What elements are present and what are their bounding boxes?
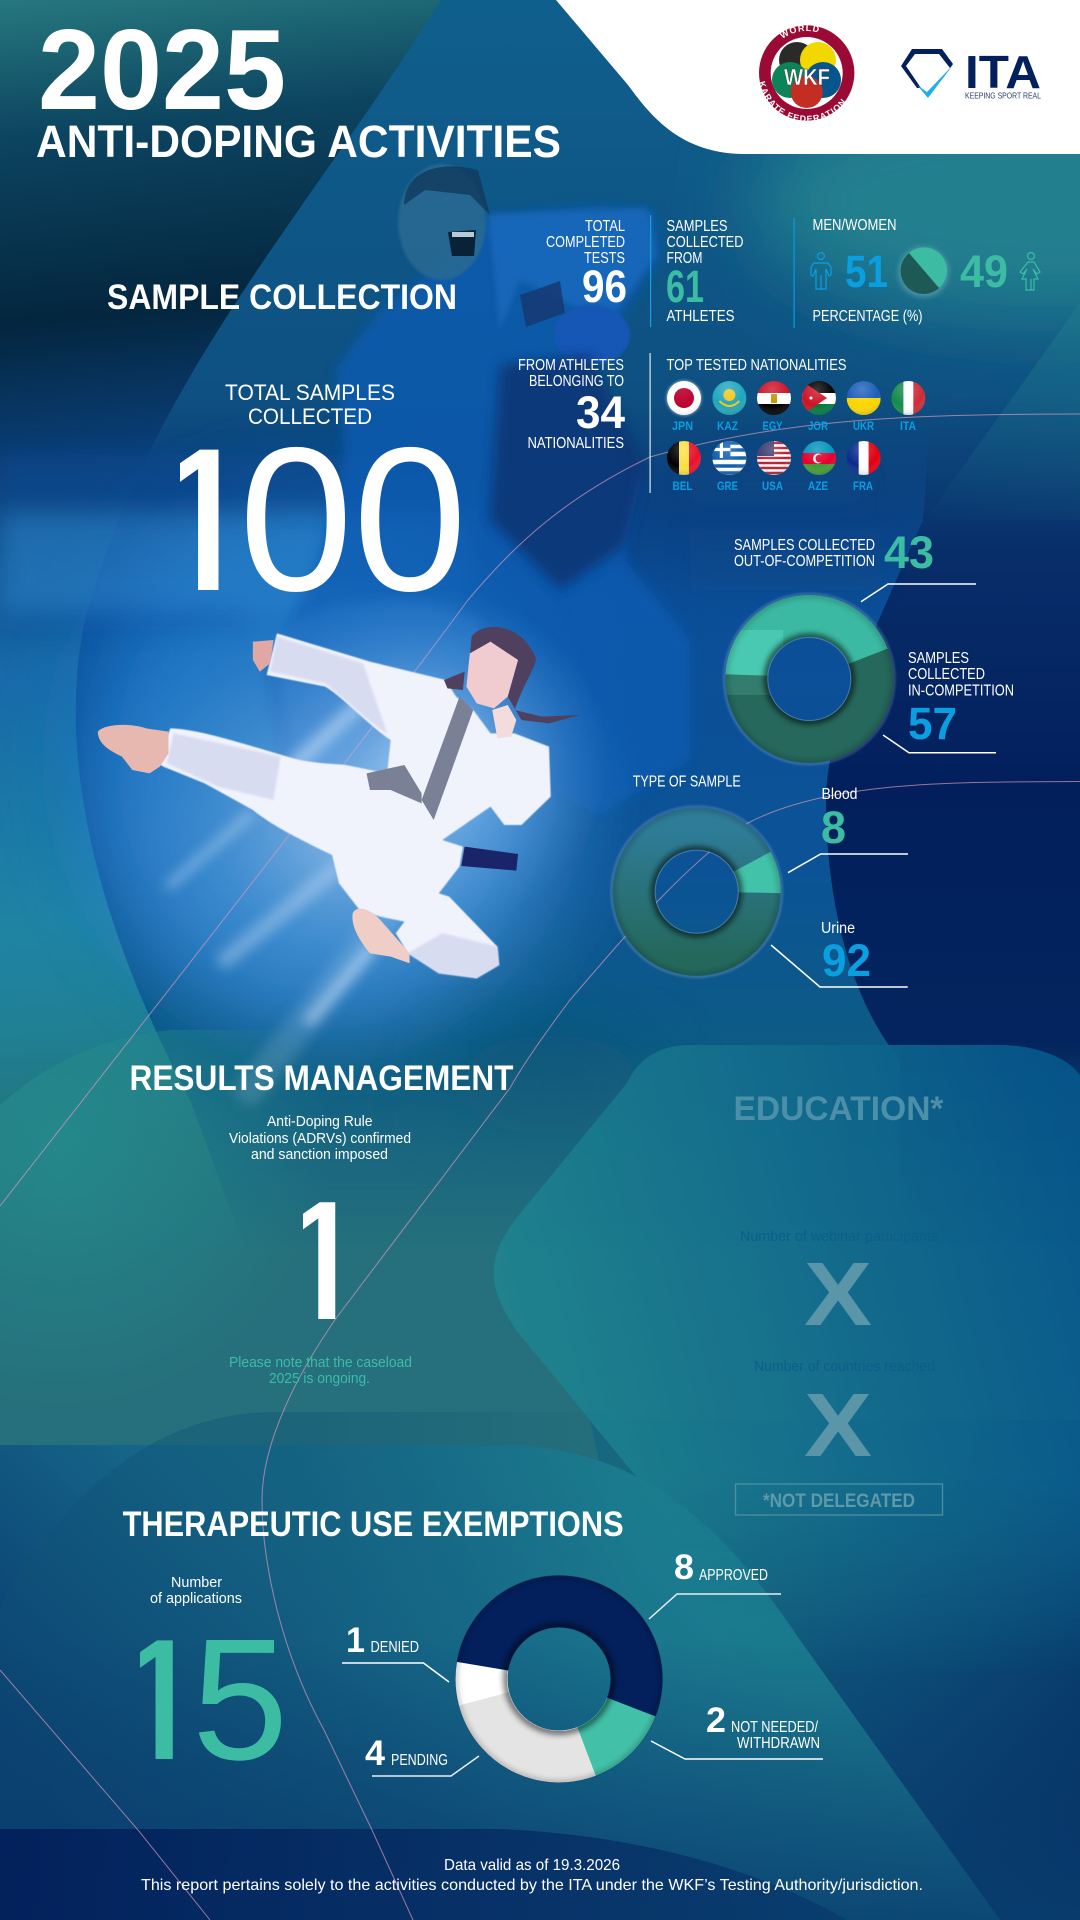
label: not needed withdrawn: [651, 1701, 823, 1759]
flag codes: BEL: [672, 479, 692, 493]
flag codes: FRA: [853, 479, 873, 493]
flag: Ukraine: [847, 381, 881, 415]
label: out of competition: 43: [884, 527, 934, 578]
heading: therapeutic use exemptions: THERAPEUTIC USE EXEMPTIONS: [123, 1505, 624, 1544]
donut: type of sample: [611, 806, 782, 977]
number of applications: 1: [106, 1599, 215, 1817]
results description: Violations (ADRVs) confirmed: [229, 1130, 411, 1147]
label: in competition: [883, 650, 1014, 753]
flag: Egypt: [757, 381, 791, 416]
flag codes: ITA: [900, 419, 916, 433]
logo: WKF: [759, 25, 854, 121]
flag: Greece: [712, 441, 746, 475]
label: not needed withdrawn: WITHDRAWN: [737, 1735, 820, 1752]
number of applications: of applications: [150, 1590, 242, 1607]
flag: USA: [757, 441, 791, 475]
flag: Japan: [666, 380, 702, 416]
background dark left wedge: [0, 0, 441, 1290]
title: ANTI-DOPING ACTIVITIES: [36, 116, 561, 167]
figure aura: [253, 587, 611, 933]
TUE section background: [0, 1445, 1000, 1920]
logo: WKF: KARATE FEDERATION: [760, 81, 845, 121]
number of applications: Number: [171, 1574, 222, 1591]
chart: men women pie: [899, 247, 949, 297]
label: in competition: IN-COMPETITION: [908, 682, 1014, 700]
bottom darkening: [0, 1640, 1080, 1920]
stat: men women percentage: [811, 217, 1040, 325]
label: blood: [788, 786, 908, 873]
stat: samples collected from athletes: COLLECTED: [666, 234, 744, 251]
results description: Anti-Doping Rule: [267, 1113, 372, 1130]
label: not needed withdrawn: 2: [706, 1701, 726, 1740]
stat: nationalities: [518, 357, 625, 452]
label: blood: 8: [821, 802, 846, 853]
label: urine: Urine: [821, 920, 855, 937]
donut: TUE outcomes: [455, 1575, 663, 1783]
stat: samples collected from athletes: 61: [666, 261, 704, 312]
divider: [794, 218, 795, 328]
figure gi: [158, 633, 551, 978]
logo: ITA: ITA: [965, 46, 1041, 98]
light rays: [170, 700, 400, 1090]
background athlete silhouette: [265, 164, 690, 820]
bottom right background: [590, 1420, 1080, 1920]
flag: Kazakhstan: [712, 381, 746, 415]
figure foot: [98, 725, 168, 773]
label: pending: PENDING: [391, 1752, 448, 1769]
label: denied: 1: [346, 1621, 365, 1660]
stat: nationalities: BELONGING TO: [529, 373, 624, 390]
label: approved: 8: [674, 1548, 694, 1587]
label: pending: 4: [365, 1734, 386, 1773]
total samples collected: COLLECTED: [248, 404, 372, 429]
figure face: [466, 642, 518, 708]
label: urine: [771, 920, 908, 987]
stat: men women percentage: PERCENTAGE (%): [812, 308, 922, 325]
top tested nationalities: TOP TESTED NATIONALITIES: [666, 357, 846, 374]
label: in competition: 57: [908, 698, 957, 749]
logo: WKF: WKF: [784, 64, 830, 90]
total samples collected: 1: [140, 400, 268, 658]
stat: samples collected from athletes: FROM: [666, 250, 702, 267]
label: in competition: SAMPLES: [908, 650, 969, 667]
number of applications: [140, 1576, 281, 1761]
label: blood: Blood: [822, 786, 858, 803]
results section background: [0, 1030, 1080, 1500]
stat: nationalities: FROM ATHLETES: [518, 357, 624, 374]
flag: France: [847, 441, 881, 475]
figure belt end: [461, 847, 518, 871]
number of applications: 5: [192, 1602, 288, 1796]
logo: WKF: WORLD: [780, 25, 819, 38]
background white-blue glow: [50, 570, 650, 1090]
label: denied: DENIED: [370, 1639, 419, 1656]
flag: Azerbaijan: [802, 441, 836, 476]
footer note: [141, 1857, 923, 1894]
stat: samples collected from athletes: SAMPLES: [666, 218, 728, 235]
education panel background: [494, 1045, 1080, 1618]
karate athlete figure: [98, 587, 611, 978]
label: in competition: COLLECTED: [908, 666, 985, 683]
flag codes: AZE: [808, 479, 828, 493]
education section: X: [804, 1376, 872, 1476]
education section: X: [804, 1245, 872, 1345]
white header panel: [556, 0, 1080, 154]
flag codes: [672, 419, 916, 493]
results description: [229, 1113, 411, 1163]
stat: men women percentage: 49: [960, 246, 1008, 297]
stat: total completed tests: COMPLETED: [546, 234, 625, 251]
education section: Number of webinar participants: [740, 1228, 938, 1245]
figure hair: [444, 627, 580, 723]
education section: Number of countries reached: [754, 1358, 935, 1375]
background blue body area: [0, 420, 930, 1300]
education section: EDUCATION*: [734, 1090, 944, 1128]
flag codes: GRE: [717, 479, 738, 493]
flag: Belgium: [667, 441, 701, 475]
figure fist: [253, 640, 274, 672]
flag codes: EGY: [762, 419, 782, 433]
label: approved: [649, 1548, 781, 1619]
stat: total completed tests: TOTAL: [585, 218, 625, 235]
pink accent lines: [0, 414, 1080, 1920]
flag codes: JPN: [672, 419, 693, 433]
flag: Jordan: [802, 381, 836, 416]
stat: samples collected from athletes: [666, 218, 744, 325]
figure gi shading: [167, 637, 499, 978]
background central blue glow: [80, 490, 560, 1030]
stat: samples collected from athletes: ATHLETES: [666, 308, 734, 325]
top tested nationalities: [666, 357, 925, 493]
results note: 2025 is ongoing.: [269, 1370, 370, 1387]
icon: man: [811, 253, 831, 290]
footer note: This report pertains solely to the activities conducted by the ITA under the WKF’s Testing Authority/jurisdiction.: [141, 1877, 923, 1894]
background top right teal: [750, 80, 1080, 320]
footer band: [0, 1829, 847, 1920]
logo: ITA: KEEPING SPORT REAL: [965, 90, 1041, 100]
stat: total completed tests: [546, 218, 627, 312]
label: urine: 92: [822, 935, 871, 986]
label: approved: APPROVED: [699, 1567, 768, 1584]
stat: total completed tests: 96: [582, 261, 627, 312]
icon: woman: [1020, 253, 1040, 290]
type of sample heading: TYPE OF SAMPLE: [633, 774, 741, 791]
logo: ITA: [901, 46, 1041, 100]
label: out of competition: [734, 527, 976, 602]
donut: out of competition vs in competition: [724, 594, 894, 764]
background arena band: [0, 450, 880, 626]
right lighter triangle: [925, 303, 1080, 520]
results number: 1: [270, 1160, 377, 1375]
stat: total completed tests: TESTS: [584, 250, 625, 267]
flag: Italy: [891, 381, 925, 415]
flag codes: KAZ: [717, 419, 738, 433]
heading: sample collection: SAMPLE COLLECTION: [107, 278, 457, 317]
divider: [650, 215, 651, 327]
stat: men women percentage: MEN/WOMEN: [812, 217, 896, 234]
results description: and sanction imposed: [251, 1146, 388, 1163]
total samples collected: TOTAL SAMPLES: [225, 380, 395, 405]
flag codes: USA: [762, 479, 783, 493]
TUE dark arc background: [0, 1412, 640, 1920]
title: 2025: [38, 7, 286, 134]
divider: [650, 353, 651, 493]
flag codes: JOR: [808, 419, 828, 433]
stat: nationalities: NATIONALITIES: [528, 435, 624, 452]
results note: Please note that the caseload: [229, 1354, 412, 1371]
heading: results management: RESULTS MANAGEMENT: [130, 1059, 514, 1098]
label: denied: [342, 1621, 449, 1682]
flag codes: UKR: [853, 419, 874, 433]
total samples collected: 00: [239, 405, 467, 634]
figure lower foot: [352, 909, 410, 963]
stat: men women percentage: 51: [845, 246, 888, 297]
education section: *NOT DELEGATED: [763, 1491, 915, 1512]
stat: nationalities: 34: [576, 387, 625, 438]
title: [36, 7, 561, 167]
total samples collected: [140, 380, 467, 658]
label: pending: [365, 1734, 479, 1776]
label: out of competition: OUT-OF-COMPETITION: [734, 553, 875, 570]
figure guard fist: [492, 705, 516, 738]
results note: [229, 1354, 412, 1387]
label: out of competition: SAMPLES COLLECTED: [734, 537, 875, 554]
label: not needed withdrawn: NOT NEEDED/: [731, 1719, 818, 1736]
footer note: Data valid as of 19.3.2026: [444, 1857, 620, 1874]
figure lapel and belt: [367, 697, 473, 820]
education section: [734, 1090, 944, 1515]
